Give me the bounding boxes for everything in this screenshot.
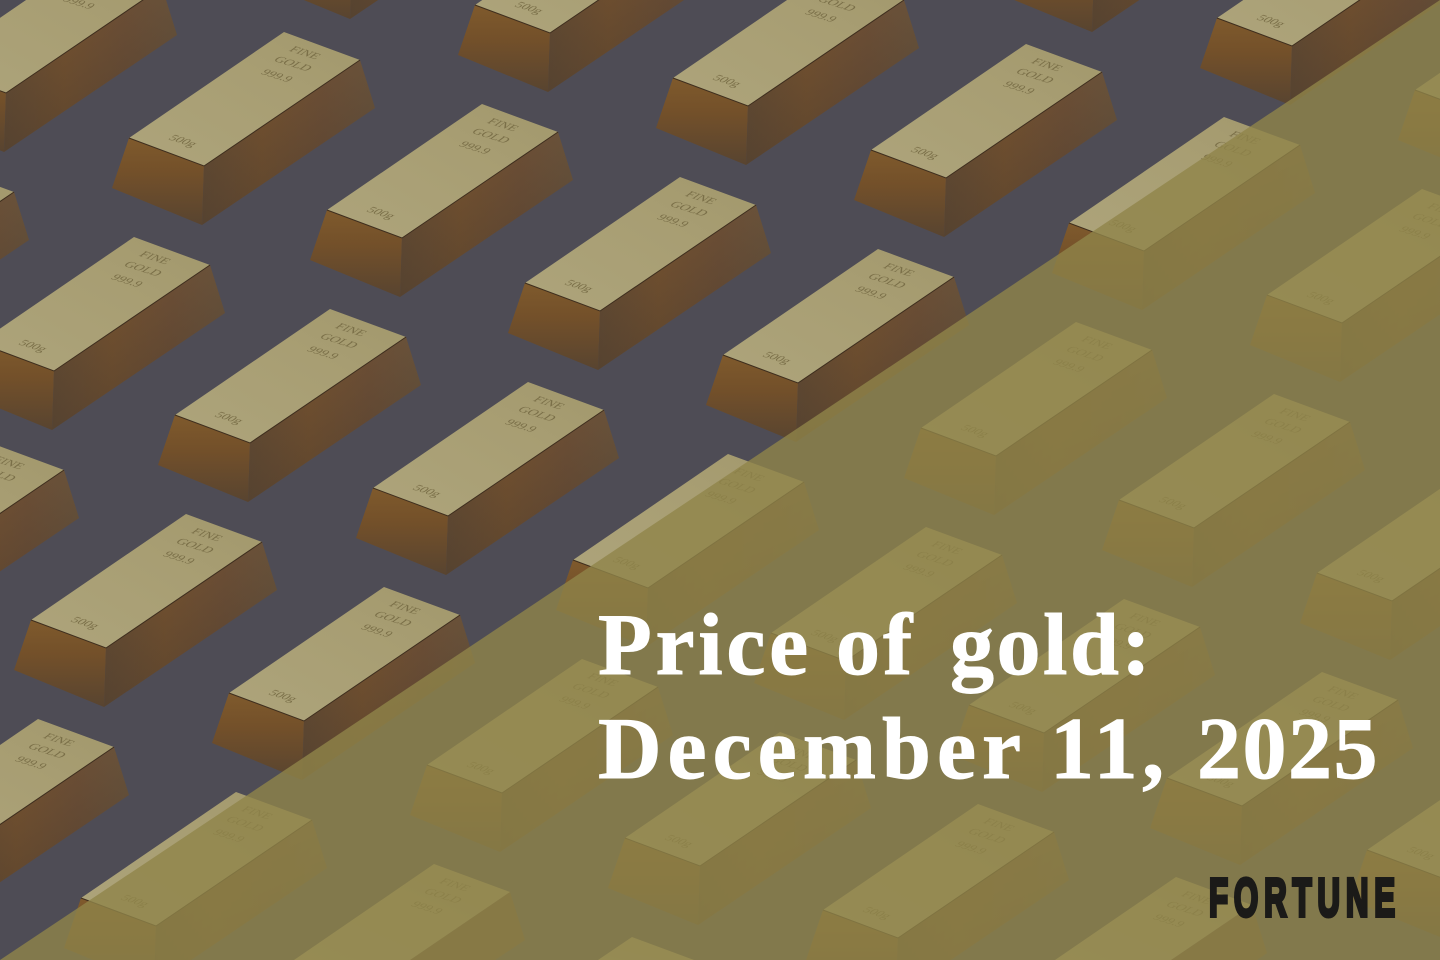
cropped gold bar at bottom edge, right: 999.9 bbox=[1150, 912, 1188, 929]
title bbox=[598, 597, 1379, 798]
title line 2: December bbox=[598, 701, 1027, 798]
cropped gold bar at bottom edge, right: FINE bbox=[1178, 889, 1217, 906]
title line 2: 2025 bbox=[1197, 701, 1379, 798]
gold bars row 6 bbox=[0, 719, 327, 960]
FORTUNE logo: FORTUNE bbox=[1209, 868, 1401, 928]
cropped gold bar at bottom edge, left bbox=[294, 864, 525, 960]
title line 1: Price bbox=[598, 597, 812, 694]
cropped gold bar at bottom edge, centre bbox=[598, 937, 694, 960]
cropped gold bar at bottom edge, left: 999.9 bbox=[408, 899, 446, 916]
title line 2 bbox=[598, 701, 1379, 798]
cropped gold bar at bottom edge, left: FINE bbox=[436, 876, 475, 893]
gold bars row 3 bbox=[0, 0, 1440, 660]
title line 1 bbox=[598, 597, 1153, 694]
title line 1: of bbox=[836, 597, 915, 694]
title line 1: gold: bbox=[950, 597, 1153, 694]
gold bars row 5 bbox=[0, 442, 1069, 960]
cropped gold bar at bottom edge, right: GOLD bbox=[1163, 899, 1208, 918]
gold bars row 1 bbox=[1002, 0, 1440, 177]
title line 2: 11, bbox=[1050, 701, 1169, 798]
cropped gold bar at bottom edge, left: GOLD bbox=[421, 886, 466, 905]
cropped gold bar at bottom edge, right bbox=[1055, 877, 1267, 960]
gold bars row 2 bbox=[260, 0, 1440, 382]
